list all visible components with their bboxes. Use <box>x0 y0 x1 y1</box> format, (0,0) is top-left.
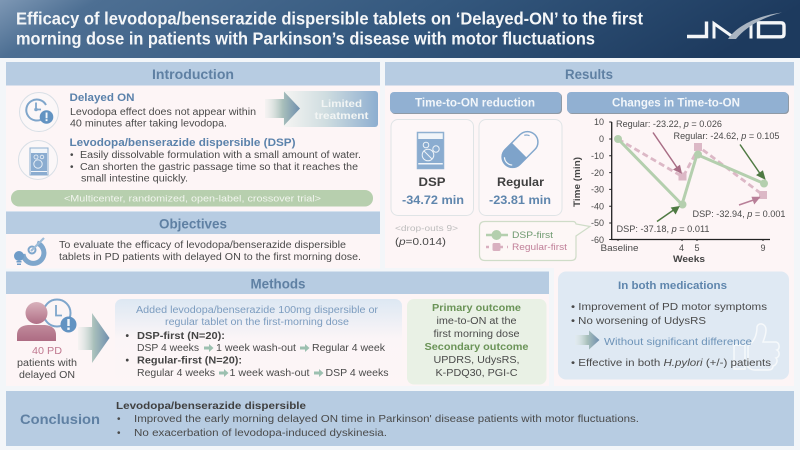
box: outcomes: first morning dose <box>434 329 520 340</box>
y-axis tick labels: -60 <box>591 235 604 245</box>
text: levodopa/benserazide dispersible: Easily dissolvable formulation with a small amount of water. <box>80 150 361 161</box>
card: DSP <box>391 120 474 216</box>
box: outcomes: Secondary outcome <box>424 342 529 353</box>
y-axis tick labels: -20 <box>591 168 604 178</box>
box: study protocol <box>115 299 402 386</box>
y-axis tick labels: -40 <box>591 202 604 212</box>
text: DSP-first arm: 1 week wash-out <box>216 343 296 354</box>
label: trial design: <Multicenter, randomized, open-label, crossover trial> <box>64 194 321 204</box>
icon: clock alert <box>20 92 58 132</box>
box: outcomes <box>407 299 546 384</box>
callout: limited treatment <box>265 91 378 127</box>
text: regular-first arm: DSP 4 weeks <box>326 368 388 379</box>
text: conclusion points: Improved the early morning delayed ON time in Parkinson' disease patients with motor fluctuations. <box>134 414 639 425</box>
card: regular: -23.81 min <box>489 193 551 207</box>
text: findings: • Effective in both H.pylori (+/-) patients <box>571 357 771 369</box>
text: levodopa/benserazide dispersible: small intestine quickly. <box>81 174 188 184</box>
text: levodopa/benserazide dispersible: • <box>70 150 74 161</box>
text: levodopa/benserazide dispersible: Levodopa/benserazide dispersible (DSP) <box>70 137 296 149</box>
text: findings: • No worsening of UdysRS <box>571 315 706 327</box>
heading: results: Results <box>565 67 613 82</box>
text: objective: tablets in PD patients with delayed ON to the first morning dose. <box>59 252 361 263</box>
text: levodopa/benserazide dispersible <box>70 137 361 184</box>
title <box>16 8 643 48</box>
text: delayed ON: 40 minutes after taking levodopa. <box>70 118 227 130</box>
text: objective <box>59 240 361 263</box>
series: DSP-first <box>614 135 768 208</box>
text: conclusion points <box>116 401 639 439</box>
arrows <box>653 132 764 222</box>
header banner <box>0 0 800 58</box>
text: levodopa/benserazide dispersible: Can shorten the gastric passage time so that it reaches the <box>80 162 358 173</box>
text: conclusion points: • <box>117 428 121 439</box>
text: DSP-first arm: DSP 4 weeks <box>137 343 199 354</box>
arrow: without significant difference <box>575 330 752 350</box>
heading: conclusion: Conclusion <box>20 411 100 427</box>
title: Efficacy of levodopa/benserazide dispersible tablets on ‘Delayed-ON’ to the first <box>16 8 643 28</box>
annotations: Regular: -24.62, p = 0.105 <box>674 131 780 141</box>
logo: JMD <box>687 12 784 39</box>
panel: results <box>385 62 794 268</box>
x-axis tick labels: 5 <box>694 243 700 253</box>
text: conclusion points: No exacerbation of levodopa-induced dyskinesia. <box>134 428 387 439</box>
box: outcomes: ime-to-ON at the <box>436 316 517 327</box>
icon: target with bulb <box>14 238 44 265</box>
line chart: changes in time-to-ON <box>572 117 786 265</box>
card: DSP: DSP <box>418 175 446 189</box>
text: DSP-first arm: DSP-first (N=20): <box>137 331 225 342</box>
text: objective: To evaluate the efficacy of levodopa/benserazide dispersible <box>59 240 346 251</box>
text: regular-first arm: 1 week wash-out <box>230 368 310 379</box>
icon: glass of water <box>18 140 58 180</box>
note: p-value: (p=0.014) <box>395 237 446 248</box>
callout: limited treatment: Limited <box>321 98 362 110</box>
text: conclusion points: • <box>117 414 121 425</box>
icon: patient with delayed clock <box>17 300 76 341</box>
subheading: time-to-ON reduction: Time-to-ON reduction <box>415 98 535 110</box>
text: 40 PD patients: delayed ON <box>19 370 75 381</box>
card: DSP: -34.72 min <box>402 193 464 207</box>
y-axis tick labels <box>591 117 604 245</box>
text: regular-first arm <box>126 356 388 379</box>
text: intervention <box>136 305 379 328</box>
icon: thumbs up <box>734 324 779 370</box>
y-axis tick labels: 0 <box>599 134 604 144</box>
text: DSP-first arm: • <box>126 331 130 342</box>
note: p-value: <drop-outs 9> <box>395 224 458 233</box>
axis title: time: Time (min) <box>572 157 583 207</box>
title: morning dose in patients with Parkinson’s disease with motor fluctuations <box>16 28 595 48</box>
icon: glass <box>418 132 444 168</box>
text: 40 PD patients: patients with <box>17 358 77 369</box>
annotations: DSP: -37.18, p = 0.011 <box>616 224 710 234</box>
heading: methods: Methods <box>250 276 306 292</box>
panel: methods <box>6 272 549 386</box>
y-axis tick labels: -10 <box>591 151 604 161</box>
subheading: time-to-ON reduction <box>390 92 562 114</box>
axes <box>612 122 770 240</box>
panel: introduction <box>6 62 380 211</box>
subheading: changes in time-to-ON: Changes in Time-to-ON <box>612 98 740 110</box>
panel: objectives <box>6 212 380 268</box>
text: intervention: Added levodopa/benserazide 100mg dispersible or <box>136 305 379 316</box>
text: regular-first arm: • <box>126 356 130 366</box>
text: findings: • Improvement of PD motor symptoms <box>571 301 767 313</box>
text: regular-first arm: Regular-first (N=20): <box>137 356 242 366</box>
box: outcomes: UPDRS, UdysRS, <box>434 355 520 366</box>
text: conclusion points: Levodopa/benserazide dispersible <box>116 401 307 412</box>
text: findings <box>571 301 771 369</box>
text: DSP-first arm: Regular 4 week <box>312 343 386 354</box>
text: regular-first arm: Regular 4 weeks <box>137 368 215 379</box>
card: regular <box>479 120 562 216</box>
text: levodopa/benserazide dispersible: • <box>70 162 74 173</box>
y-axis tick labels: 10 <box>594 117 604 127</box>
text: DSP-first arm <box>126 331 386 354</box>
y-axis tick labels: -50 <box>591 218 604 228</box>
axis title: weeks: Weeks <box>673 254 705 265</box>
note: p-value <box>395 224 458 248</box>
text: delayed ON <box>70 92 256 130</box>
series: regular-first <box>618 139 767 199</box>
text: intervention: regular tablet on the first-morning dose <box>165 317 349 328</box>
x-axis tick labels: 9 <box>760 243 766 253</box>
x-axis tick labels <box>600 243 766 253</box>
x-axis tick labels: Baseline <box>600 243 638 253</box>
panel: in both medications <box>554 268 794 386</box>
arrow: patients to protocol <box>78 313 110 363</box>
callout: limited treatment: treatment <box>314 110 369 122</box>
text: delayed ON: Levodopa effect does not appear within <box>70 107 256 118</box>
box: outcomes: K-PDQ30, PGI-C <box>436 368 518 379</box>
card: regular: Regular <box>497 175 544 189</box>
arrow: without significant difference: Without significant difference <box>604 336 752 348</box>
y-axis tick labels: -30 <box>591 184 604 194</box>
heading: in both medications: In both medications <box>618 280 727 292</box>
x-axis tick labels: 4 <box>679 243 684 253</box>
text: 40 PD patients <box>17 346 77 381</box>
heading: introduction: Introduction <box>152 67 234 82</box>
icon: capsule <box>497 127 543 172</box>
legend: DSP-first <box>512 230 553 241</box>
subheading: changes in time-to-ON <box>567 92 789 114</box>
text: delayed ON: Delayed ON <box>70 92 135 104</box>
box: outcomes: Primary outcome <box>432 303 521 314</box>
heading: objectives: Objectives <box>159 216 227 232</box>
legend <box>480 222 590 260</box>
annotations: DSP: -32.94, p = 0.001 <box>692 209 786 219</box>
annotations: Regular: -23.22, p = 0.026 <box>616 119 722 129</box>
annotations <box>616 119 786 234</box>
legend: Regular-first <box>512 242 567 253</box>
panel: conclusion <box>6 391 794 446</box>
label: trial design <box>11 190 373 206</box>
text: 40 PD patients: 40 PD <box>32 346 62 357</box>
